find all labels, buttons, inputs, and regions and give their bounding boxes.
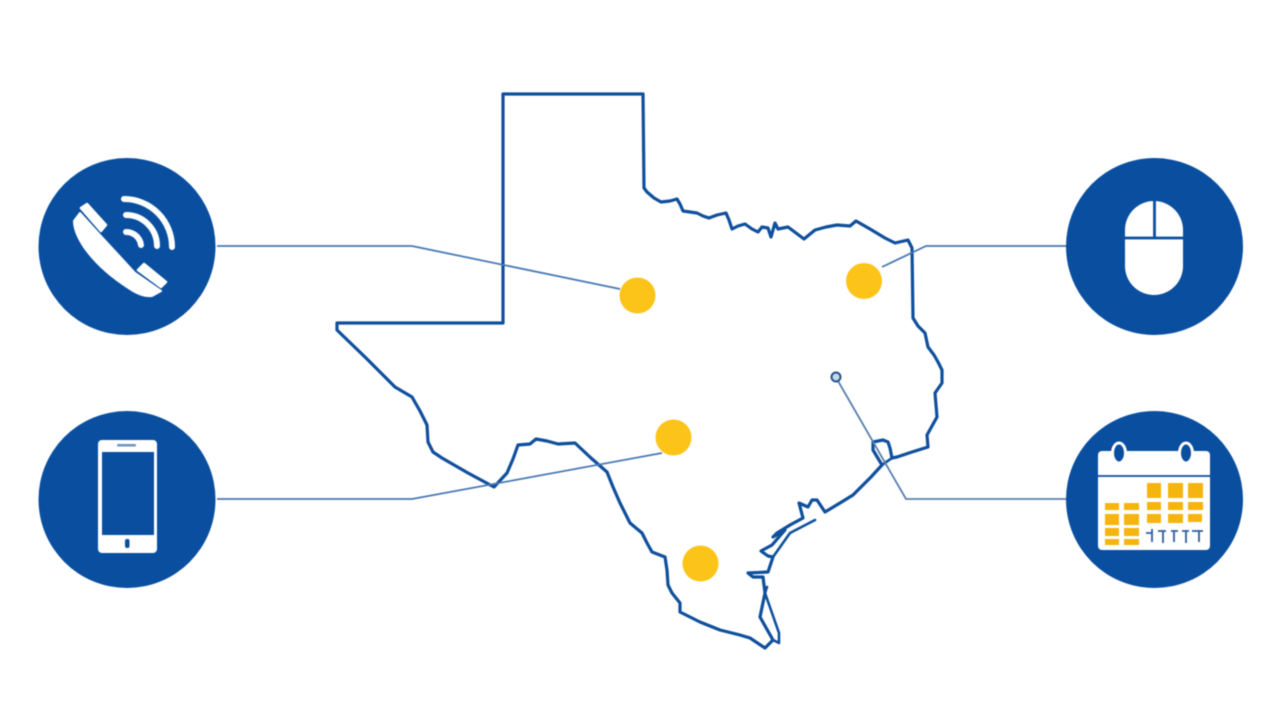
icon: smartphone <box>38 411 216 588</box>
map of Texas <box>337 94 942 648</box>
calendar yellow day blocks <box>1105 483 1203 545</box>
calendar rings <box>1112 443 1192 463</box>
small marker <box>832 372 840 382</box>
connector: phone call to dot <box>217 246 620 289</box>
calendar small blue marks <box>1146 529 1203 543</box>
connector: smartphone to dot <box>217 453 662 499</box>
icon: telephone call <box>38 158 216 335</box>
icon: computer mouse <box>1066 158 1243 335</box>
connector: mouse to dot <box>882 246 1066 267</box>
icon: calendar <box>1066 411 1243 588</box>
connector: calendar to small marker <box>838 381 1066 499</box>
yellow location dots <box>620 263 882 582</box>
